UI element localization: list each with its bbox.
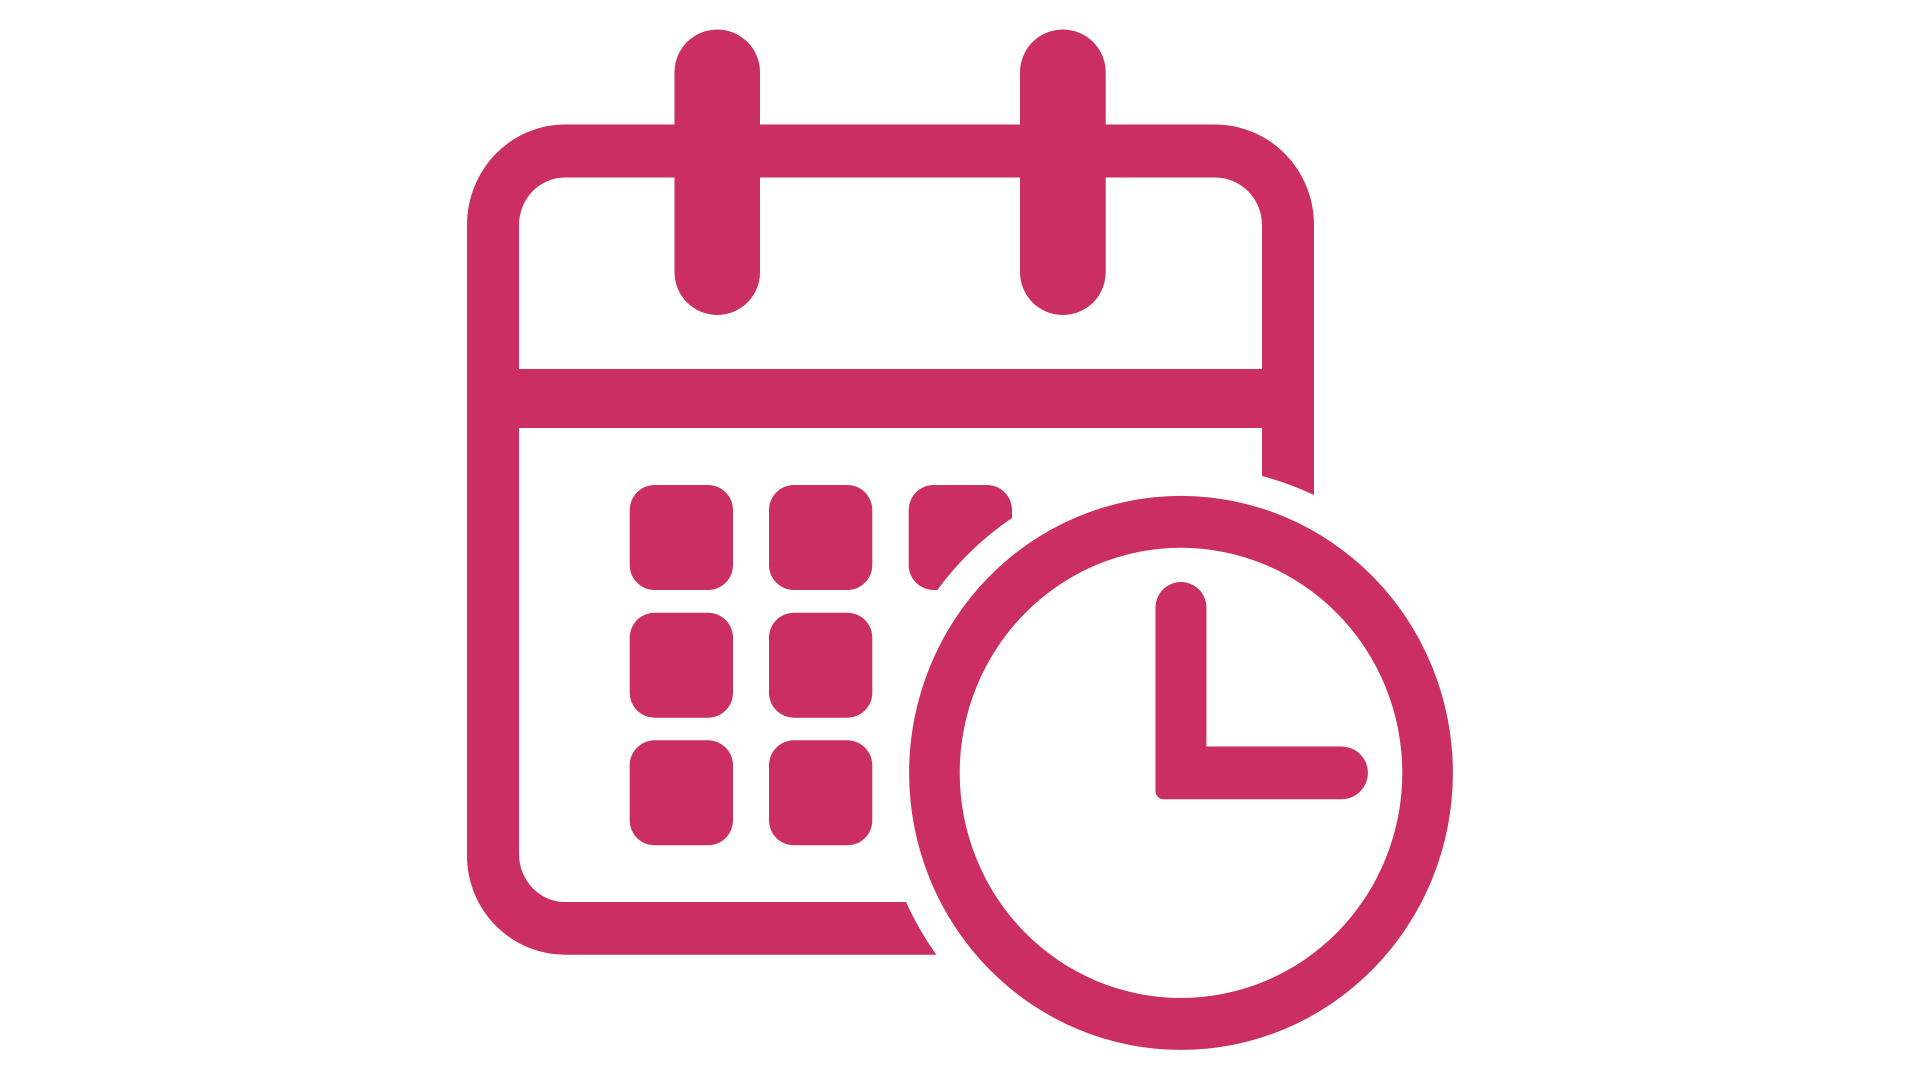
clock: [909, 496, 1453, 1050]
calendar ring: right: [1020, 30, 1106, 315]
date tile: row 2 column 1: [630, 613, 733, 718]
date tile: row 3 column 2: [769, 740, 872, 845]
date tile: row 2 column 2: [769, 613, 872, 718]
clock hands: [1156, 582, 1368, 799]
calendar: outer frame with header band: [467, 124, 1314, 955]
clock face ring: [909, 496, 1453, 1050]
date tile: row 1 column 1: [630, 485, 733, 590]
calendar ring: left: [674, 30, 760, 315]
date tile: row 3 column 1: [630, 740, 733, 845]
date tile: row 1 column 3, cut by clock: [909, 485, 1012, 590]
date tile: row 1 column 2: [769, 485, 872, 590]
date grid: [630, 485, 1012, 845]
